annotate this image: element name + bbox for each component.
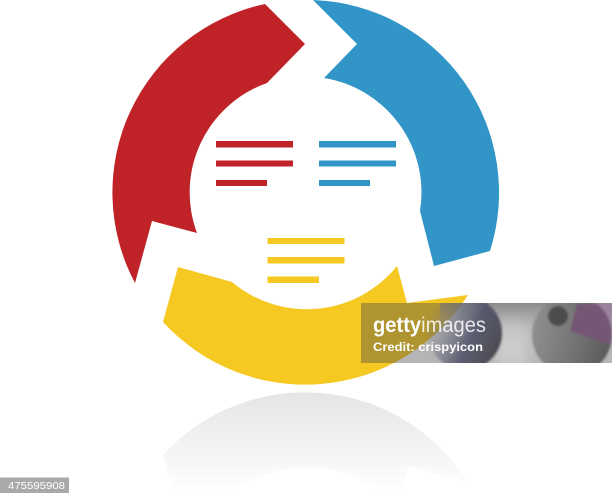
yellow text lines <box>268 238 344 283</box>
red text lines <box>216 141 293 186</box>
image id label <box>0 478 69 493</box>
blue arrow segment <box>313 0 499 266</box>
watermark logo text: gettyimages <box>373 314 486 337</box>
red arrow segment <box>112 4 305 283</box>
yellow arrow segment <box>163 266 468 385</box>
watermark banner <box>361 303 612 363</box>
reflection of yellow arrow <box>163 392 468 499</box>
image id label: 475595908 <box>8 480 65 492</box>
watermark credit text: Credit: crispyicon <box>373 340 483 354</box>
blue text lines <box>319 141 396 186</box>
